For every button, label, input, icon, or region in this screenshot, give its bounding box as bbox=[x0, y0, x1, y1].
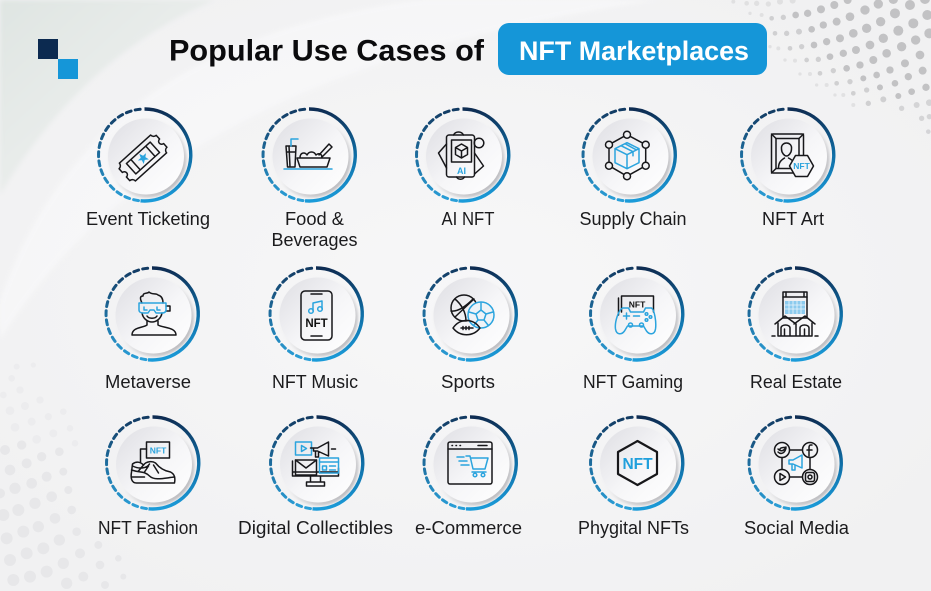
card: Sports bbox=[424, 268, 516, 392]
icon: NFT hexagon: NFT bbox=[622, 456, 653, 473]
card: Phygital NFTs bbox=[578, 417, 689, 538]
icon: browser with cart bbox=[448, 442, 492, 484]
icon: phone with music note: NFT bbox=[305, 318, 328, 330]
card: NFT Music bbox=[270, 268, 362, 392]
label bbox=[272, 209, 358, 250]
dot pattern: bottom left bbox=[0, 362, 126, 589]
card: e-Commerce bbox=[415, 417, 522, 538]
card: AI NFT bbox=[417, 109, 509, 229]
label: AI NFT bbox=[442, 209, 495, 229]
icon: monitor with media bbox=[292, 442, 338, 486]
label: NFT Fashion bbox=[98, 518, 198, 538]
card: Real Estate bbox=[749, 268, 842, 392]
label: Supply Chain bbox=[580, 209, 686, 229]
icon: person with VR goggles bbox=[132, 292, 176, 335]
icon: AI card: AI bbox=[457, 166, 466, 176]
icon: sneaker with NFT tag: NFT bbox=[150, 446, 167, 456]
label: e-Commerce bbox=[415, 518, 522, 538]
card: Digital Collectibles bbox=[238, 417, 393, 538]
icon: supply network box bbox=[606, 131, 649, 180]
label: Phygital NFTs bbox=[578, 518, 689, 538]
label: Social Media bbox=[744, 518, 850, 538]
icon: tower and houses bbox=[772, 292, 818, 336]
title: Popular Use Cases of bbox=[169, 34, 485, 68]
card: NFT Gaming bbox=[583, 268, 683, 392]
icon: ticket bbox=[116, 132, 170, 184]
label: NFT Art bbox=[762, 209, 824, 229]
label: Food & bbox=[285, 209, 344, 229]
title pill: NFT Marketplaces bbox=[519, 36, 749, 66]
card: Supply Chain bbox=[580, 109, 686, 229]
icon: game controller with NFT screen: NFT bbox=[629, 300, 646, 310]
card: Social Media bbox=[744, 417, 850, 538]
label: Digital Collectibles bbox=[238, 518, 393, 538]
dot pattern: top right bbox=[731, 0, 931, 134]
icon: sports balls bbox=[451, 295, 494, 335]
card: NFT Art bbox=[742, 109, 834, 229]
card: Metaverse bbox=[105, 268, 198, 392]
title pill bbox=[498, 23, 767, 75]
logo mark bbox=[38, 39, 78, 79]
label: Sports bbox=[441, 372, 495, 392]
label: NFT Music bbox=[272, 372, 358, 392]
label: Beverages bbox=[272, 230, 358, 250]
label: Real Estate bbox=[750, 372, 842, 392]
label: Metaverse bbox=[105, 372, 191, 392]
icon: food bowl and drink bbox=[284, 139, 332, 169]
card: Event Ticketing bbox=[86, 109, 210, 229]
card: NFT Fashion bbox=[98, 417, 199, 538]
icon: social network bbox=[774, 442, 818, 484]
label: NFT Gaming bbox=[583, 372, 683, 392]
icon: framed portrait with NFT badge: NFT bbox=[793, 161, 811, 171]
card: Food & Beverages bbox=[263, 109, 358, 250]
label: Event Ticketing bbox=[86, 209, 210, 229]
